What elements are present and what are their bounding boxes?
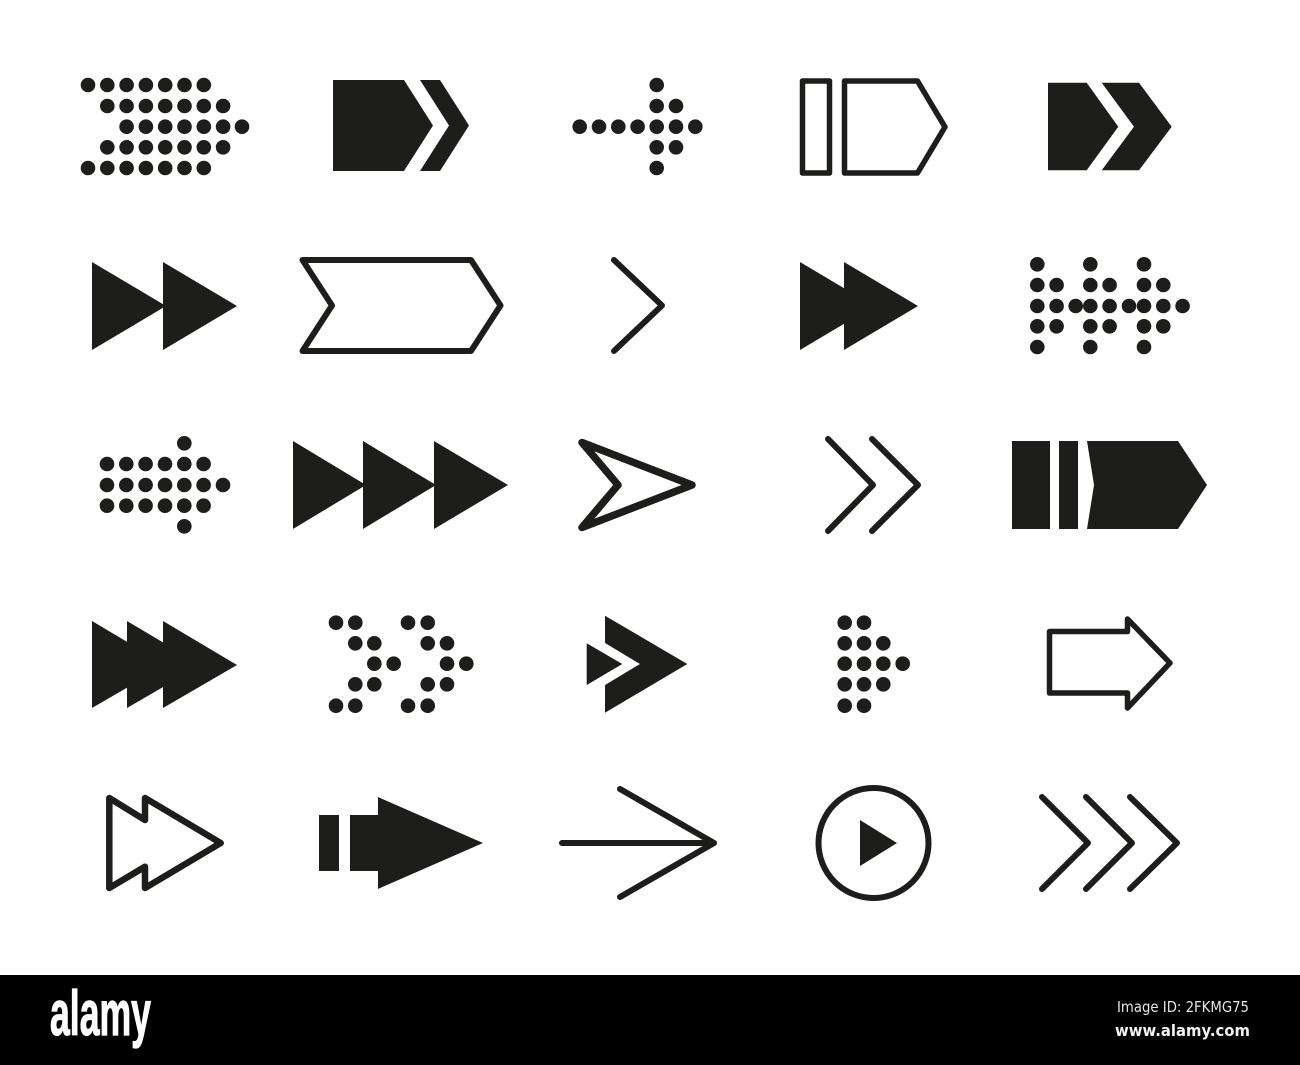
icon: solid double triangle (92, 262, 237, 350)
website: www.alamy.com (1115, 1021, 1250, 1040)
icon: outlined bar and pentagon (802, 81, 945, 173)
icon: solid bars and pentagon (1012, 441, 1207, 529)
icon: bar and solid arrow (319, 797, 483, 889)
icon: dotted thin arrow (572, 78, 703, 175)
icon: double chevron (828, 439, 918, 531)
icon: dotted triple arrow (1030, 257, 1190, 354)
image id: Image ID: 2FKMG75 (1117, 998, 1249, 1016)
icon: dotted double chevron (329, 615, 474, 713)
icon: solid double triangle small gap (800, 262, 918, 350)
icon: dotted triangle arrow (837, 615, 910, 713)
alamy logo: alamy (50, 979, 151, 1049)
icon: outlined ribbon arrow (302, 260, 500, 351)
icon: triple chevron (1042, 797, 1177, 889)
icon: outlined dart arrow (582, 442, 692, 528)
icon: dotted wide arrow (81, 78, 249, 175)
icon: solid double chevron block (1048, 83, 1172, 170)
icon: outlined block arrow (1050, 619, 1170, 708)
icon: play button (818, 788, 928, 898)
icon: solid triple triangle (293, 441, 508, 529)
icon: solid triangle with notched arrow (587, 616, 687, 713)
icon: thin long arrow (562, 789, 714, 897)
icon: solid overlapping triple triangle (92, 621, 237, 708)
footer bar (0, 975, 1300, 1065)
icon: single chevron (614, 260, 662, 351)
icon: solid pentagon with chevron (333, 80, 469, 171)
icon: outlined double triangle (109, 798, 221, 888)
icon: dotted block arrow (100, 436, 230, 534)
